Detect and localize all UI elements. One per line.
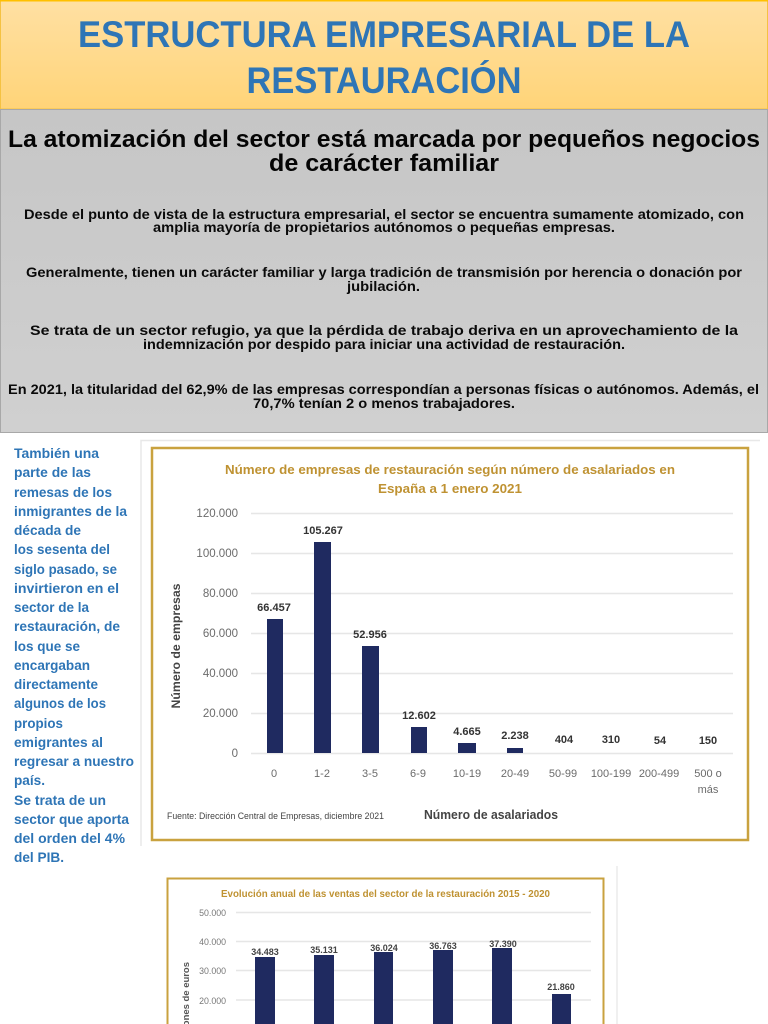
value labels: 52.956 [353, 629, 387, 641]
value labels: 34.483 [251, 947, 279, 957]
source note: Fuente: Dirección Central de Empresas, diciembre 2021 [167, 811, 384, 821]
side text: remittances: remesas de los [14, 484, 112, 500]
value labels: 404 [555, 734, 574, 746]
value labels: 4.665 [453, 726, 481, 738]
y axis labels: 20.000 [203, 708, 238, 720]
value labels: 35.131 [310, 945, 338, 955]
y axis labels: 40.000 [203, 668, 238, 680]
x axis labels [271, 768, 722, 796]
paragraph: refuge sector: indemnización por despido para iniciar una actividad de restauración. [143, 337, 625, 352]
x axis labels: 100-199 [591, 768, 631, 780]
side text: remittances: También una [14, 445, 99, 461]
side text: remittances: del PIB. [14, 849, 64, 865]
side text: remittances: emigrantes al [14, 734, 103, 750]
x axis labels: 20-49 [501, 768, 529, 780]
chart title: España a 1 enero 2021 [378, 481, 522, 496]
bars [267, 542, 523, 753]
value labels: 2.238 [501, 730, 529, 742]
chart title: Número de empresas de restauración según número de asalariados en [225, 462, 675, 477]
side text: remittances: directamente [14, 676, 98, 692]
value labels: 105.267 [303, 525, 343, 537]
side text: remittances: Se trata de un [14, 792, 106, 808]
y axis labels: 100.000 [196, 548, 238, 560]
x axis labels: 0 [271, 768, 277, 780]
paragraph: business structure: Desde el punto de vista de la estructura empresarial, el sector se encuentra sumamente atomizado, con [24, 207, 744, 222]
bars [255, 948, 571, 1024]
value labels: 310 [602, 734, 620, 746]
side text: remittances: parte de las [14, 464, 91, 480]
x axis labels: 50-99 [549, 768, 577, 780]
side text: remittances: sector de la [14, 599, 89, 615]
side text: remittances: los que se [14, 638, 80, 654]
chart: annual sales 2015-2020 [168, 866, 617, 1024]
side text: remittances: siglo pasado, se [14, 561, 117, 577]
x axis labels: 6-9 [410, 768, 426, 780]
value labels: 36.024 [370, 943, 398, 953]
value labels: 150 [699, 735, 717, 747]
side text: remittances: algunos de los [14, 695, 106, 711]
chart: companies by number of employees [141, 440, 760, 846]
paragraph: family character: Generalmente, tienen un carácter familiar y larga tradición de transmisión por herencia o donación por [26, 265, 743, 280]
value labels [257, 525, 717, 747]
side text: remittances: invirtieron en el [14, 580, 119, 596]
paragraph: 2021 figures: En 2021, la titularidad del 62,9% de las empresas correspondían a personas físicas o autónomos. Además, el [8, 382, 759, 397]
y axis labels: 20.000 [199, 996, 226, 1006]
x axis labels: más [698, 784, 719, 796]
y axis labels: 80.000 [203, 588, 238, 600]
side text: remittances: propios [14, 715, 63, 731]
y axis labels [196, 508, 238, 760]
chart title: Evolución anual de las ventas del sector de la restauración 2015 - 2020 [221, 888, 550, 900]
paragraph: 2021 figures: 70,7% tenían 2 o menos trabajadores. [253, 396, 515, 411]
paragraph: business structure: amplia mayoría de propietarios autónomos o pequeñas empresas. [153, 220, 615, 235]
side text: remittances: restauración, de [14, 618, 120, 634]
y axis labels: 60.000 [203, 628, 238, 640]
side text: remittances: década de [14, 522, 81, 538]
y axis title: Número de empresas [169, 583, 183, 708]
title: RESTAURACIÓN [246, 59, 522, 101]
value labels: 12.602 [402, 710, 436, 722]
x axis labels: 10-19 [453, 768, 481, 780]
value labels [251, 939, 575, 992]
value labels: 37.390 [489, 939, 517, 949]
paragraph: refuge sector: Se trata de un sector refugio, ya que la pérdida de trabajo deriva en un aprovechamiento de la [30, 323, 739, 338]
value labels: 36.763 [429, 941, 457, 951]
x axis labels: 3-5 [362, 768, 378, 780]
side text: remittances: regresar a nuestro [14, 753, 134, 769]
side text: remittances: sector que aporta [14, 811, 129, 827]
side text: remittances: país. [14, 772, 45, 788]
side text: remittances: inmigrantes de la [14, 503, 127, 519]
y axis labels: 40.000 [199, 937, 226, 947]
panel heading: La atomización del sector está marcada por pequeños negocios [8, 126, 760, 153]
paragraph: family character: jubilación. [346, 279, 420, 294]
y axis labels: 30.000 [199, 966, 226, 976]
panel: title banner [0, 0, 768, 109]
y axis labels: 0 [232, 748, 238, 760]
y axis labels: 50.000 [199, 908, 226, 918]
value labels: 54 [654, 735, 667, 747]
title: ESTRUCTURA EMPRESARIAL DE LA [78, 14, 690, 55]
panel heading: de carácter familiar [269, 150, 499, 177]
x axis labels: 1-2 [314, 768, 330, 780]
x axis title: Número de asalariados [424, 808, 558, 822]
x axis labels: 200-499 [639, 768, 679, 780]
x axis labels: 500 o [694, 768, 722, 780]
y axis labels: 120.000 [196, 508, 238, 520]
y axis labels [199, 908, 226, 1006]
panel: atomization text [0, 110, 768, 432]
side text: remittances: encargaban [14, 657, 90, 673]
value labels: 66.457 [257, 602, 291, 614]
value labels: 21.860 [547, 982, 575, 992]
side text: remittances: los sesenta del [14, 541, 110, 557]
side text: remittances: del orden del 4% [14, 830, 126, 846]
